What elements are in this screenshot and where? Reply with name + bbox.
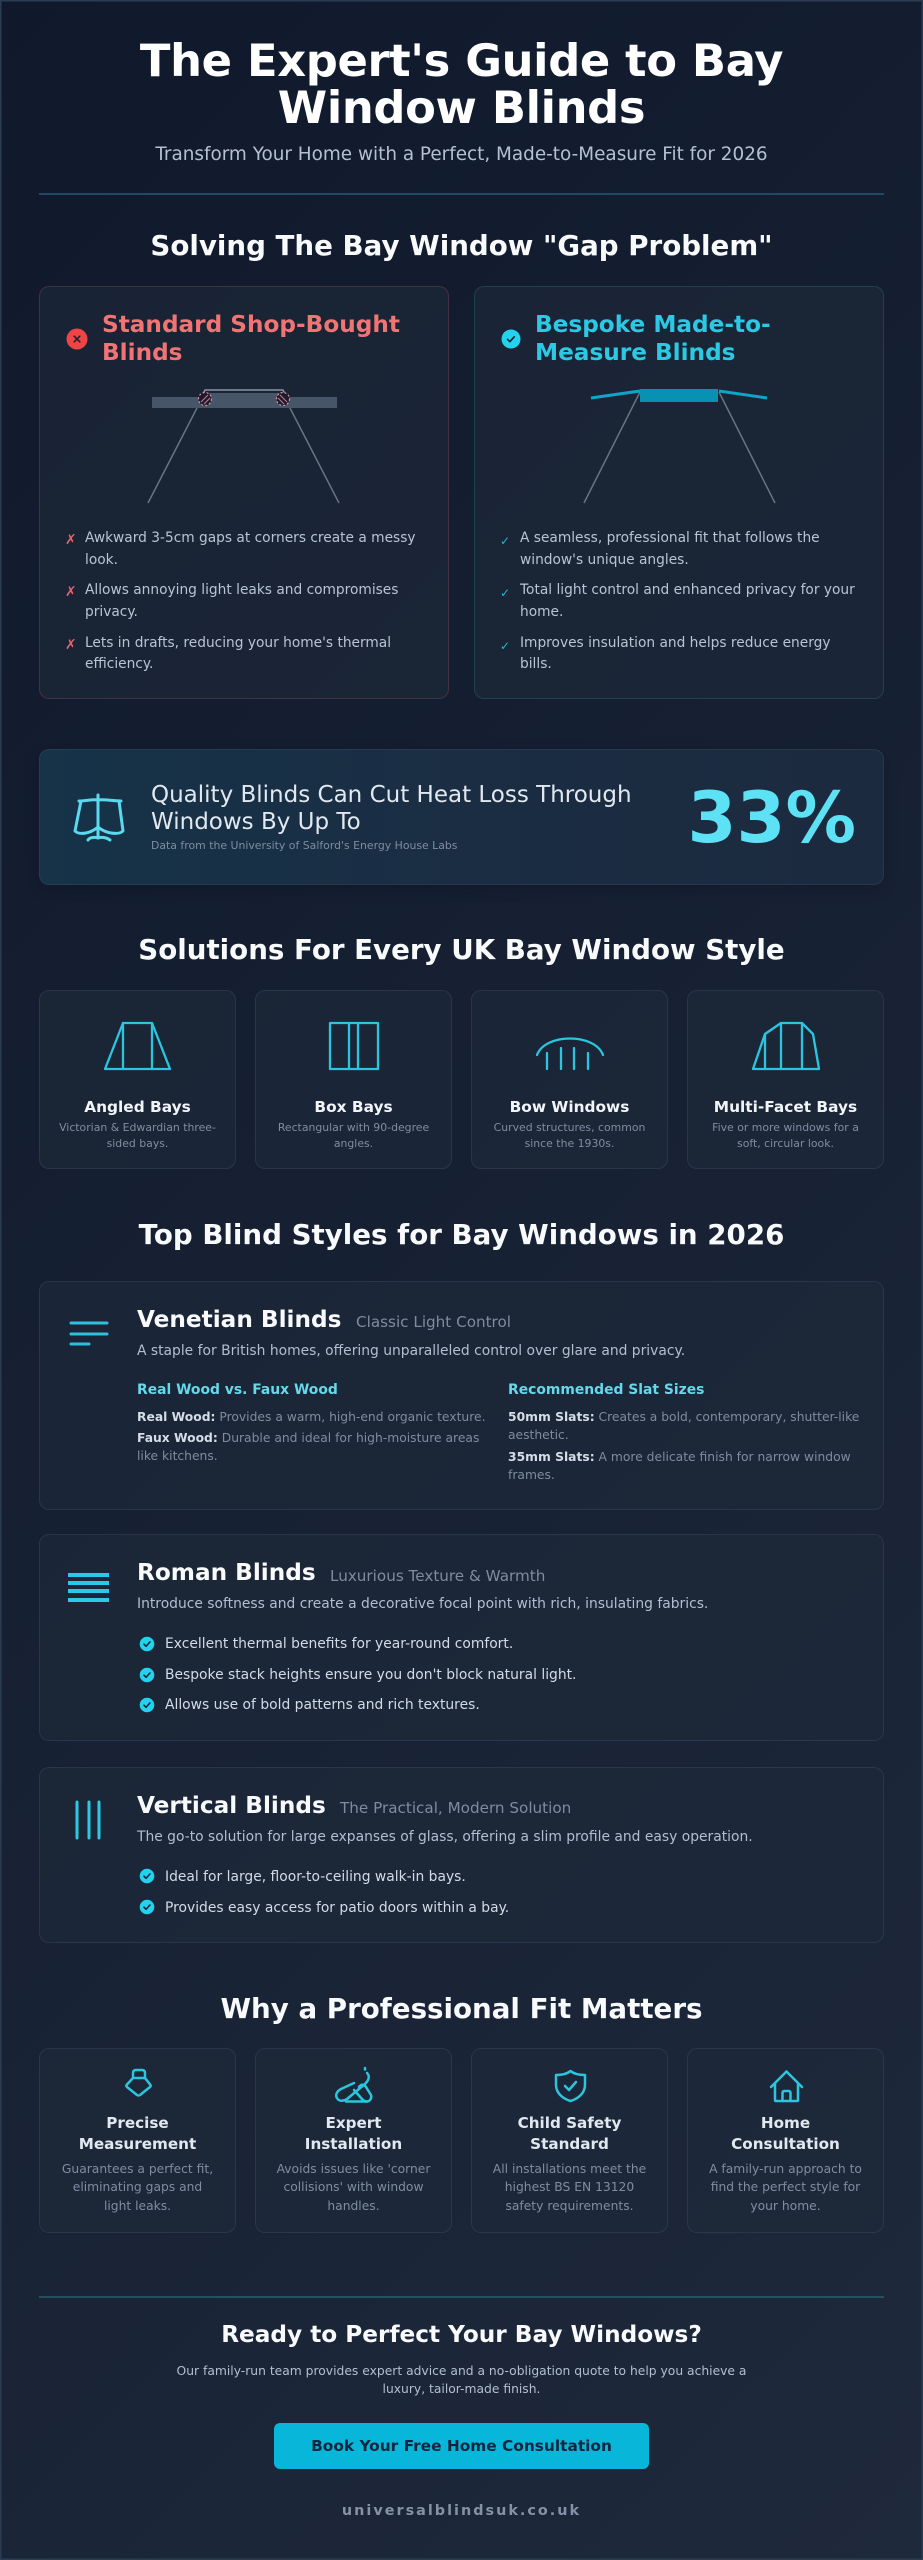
heading: standard: Blinds	[102, 339, 182, 366]
button	[274, 2423, 649, 2469]
description	[687, 2160, 884, 2215]
item	[500, 635, 830, 672]
description	[278, 1121, 429, 1150]
label: Standard	[530, 2135, 609, 2153]
label: Expert	[325, 2114, 382, 2132]
description	[255, 2160, 452, 2215]
list: benefits	[500, 530, 855, 672]
heading: standard	[102, 311, 400, 366]
title: Vertical Blinds	[137, 1792, 326, 1818]
heading: bespoke	[535, 311, 771, 366]
panel: home consultation	[687, 2048, 884, 2233]
description: Victorian & Edwardian three-	[59, 1121, 216, 1134]
icon: house	[766, 2065, 806, 2105]
description: Avoids issues like 'corner	[277, 2162, 430, 2176]
text	[137, 1431, 479, 1463]
text: frames.	[508, 1468, 555, 1482]
label	[687, 2113, 884, 2156]
description: A family-run approach to	[709, 2162, 862, 2176]
label: Box Bays	[314, 1098, 393, 1116]
item: look.	[85, 552, 118, 568]
icon: bow window	[536, 1037, 604, 1070]
item: efficiency.	[85, 656, 153, 672]
description	[39, 2160, 236, 2215]
label: Measurement	[79, 2135, 196, 2153]
description: Five or more windows for a	[712, 1121, 859, 1134]
label: Installation	[305, 2135, 402, 2153]
description: Curved structures, common	[494, 1121, 645, 1134]
description	[712, 1121, 859, 1150]
cta text: luxury, tailor-made finish.	[383, 2382, 540, 2396]
stat number: 33%	[688, 777, 856, 859]
title: The Expert's Guide to Bay	[140, 34, 783, 87]
title: Window Blinds	[278, 81, 645, 134]
diagram: perfect fit	[584, 389, 776, 504]
tagline: Luxurious Texture & Warmth	[330, 1567, 545, 1585]
label: Home	[761, 2114, 810, 2132]
label: Precise	[106, 2114, 169, 2132]
panel: expert installation	[255, 2048, 452, 2233]
description: angles.	[334, 1137, 373, 1150]
title	[140, 34, 783, 134]
icon: cyan check	[502, 330, 520, 348]
icon: scales	[74, 794, 124, 842]
text: 35mm Slats: A more delicate finish for narrow window	[508, 1450, 851, 1464]
panel: standard shop-bought blinds	[39, 286, 449, 699]
item: home.	[520, 604, 563, 620]
panel: child safety	[471, 2048, 668, 2233]
icon: shield	[550, 2065, 590, 2105]
description: All installations meet the	[493, 2162, 646, 2176]
item: ✓	[500, 639, 510, 653]
call to action	[39, 2296, 884, 2531]
description: highest BS EN 13120	[505, 2180, 634, 2194]
check icon	[140, 1868, 154, 1884]
label	[39, 2113, 236, 2156]
description: eliminating gaps and	[73, 2180, 202, 2194]
item: A seamless, professional fit that follows the	[520, 530, 820, 546]
text: aesthetic.	[508, 1428, 569, 1442]
source note: Data from the University of Salford's Energy House Labs	[151, 839, 457, 852]
item: ✓	[500, 586, 510, 600]
item: window's unique angles.	[520, 552, 689, 568]
panel: bow windows	[471, 990, 668, 1169]
item	[500, 530, 820, 568]
icon: venetian	[70, 1322, 108, 1346]
item: Awkward 3-5cm gaps at corners create a messy	[85, 530, 416, 546]
item: privacy.	[85, 604, 138, 620]
label	[255, 2113, 452, 2156]
column heading: Real Wood vs. Faux Wood	[137, 1382, 338, 1398]
panel: bespoke made-to-measure blinds	[474, 286, 884, 699]
description	[471, 2160, 668, 2215]
list item: Allows use of bold patterns and rich textures.	[165, 1697, 480, 1713]
heading: standard: Standard Shop-Bought	[102, 311, 400, 338]
item	[65, 530, 416, 568]
heading: blind styles: Top Blind Styles for Bay Windows in 2026	[139, 1218, 784, 1251]
stat text: Windows By Up To	[151, 809, 361, 835]
list item: Ideal for large, floor-to-ceiling walk-in bays.	[165, 1869, 466, 1885]
item: ✓	[500, 534, 510, 548]
list: problems	[65, 530, 416, 672]
heading: solutions: Solutions For Every UK Bay Window Style	[138, 933, 785, 966]
description: safety requirements.	[505, 2199, 634, 2213]
column: wood	[137, 1382, 486, 1463]
item	[500, 582, 855, 620]
title: Roman Blinds	[137, 1559, 316, 1586]
label: Angled Bays	[84, 1098, 191, 1116]
panel: heat loss stat	[39, 749, 884, 885]
description: The go-to solution for large expanses of glass, offering a slim profile and easy operation.	[137, 1829, 753, 1845]
icon: vertical	[76, 1800, 100, 1840]
tagline: The Practical, Modern Solution	[340, 1799, 571, 1817]
description: A staple for British homes, offering unparalleled control over glare and privacy.	[137, 1343, 685, 1359]
text: Faux Wood: Durable and ideal for high-moisture areas	[137, 1431, 479, 1445]
icon: red cross	[66, 328, 88, 350]
item: Allows annoying light leaks and compromises	[85, 582, 398, 598]
check icon	[140, 1636, 154, 1652]
description: Introduce softness and create a decorative focal point with rich, insulating fabrics.	[137, 1596, 708, 1612]
title: Venetian Blinds	[137, 1306, 341, 1332]
item: bills.	[520, 656, 552, 672]
panel: multi-facet bays	[687, 990, 884, 1169]
panel: roman blinds	[39, 1534, 884, 1741]
column: slat sizes	[508, 1382, 859, 1482]
website: universalblindsuk.co.uk	[342, 2503, 581, 2519]
icon: measurement	[118, 2065, 158, 2105]
heading: bespoke: Measure Blinds	[535, 339, 735, 366]
description: sided bays.	[107, 1137, 168, 1150]
icon: angled bay	[104, 1022, 172, 1070]
item: ✗	[65, 637, 77, 653]
icon: box bay	[328, 1022, 380, 1070]
description: handles.	[327, 2199, 380, 2213]
text	[508, 1450, 851, 1482]
label: Bow Windows	[510, 1098, 629, 1116]
item: Total light control and enhanced privacy for your	[520, 582, 855, 598]
item	[65, 582, 398, 620]
heading: professional fit: Why a Professional Fit Matters	[221, 1992, 702, 2025]
column heading: Recommended Slat Sizes	[508, 1382, 704, 1398]
item	[65, 635, 391, 672]
description: Rectangular with 90-degree	[278, 1121, 429, 1134]
button: Book Your Free Home Consultation	[311, 2437, 612, 2455]
check icon	[140, 1900, 154, 1914]
description: since the 1930s.	[525, 1137, 614, 1150]
description: your home.	[750, 2199, 821, 2213]
description: Guarantees a perfect fit,	[62, 2162, 213, 2176]
diagram: poor fit with gaps	[148, 389, 340, 504]
description: collisions' with window	[283, 2180, 424, 2194]
item: Improves insulation and helps reduce energy	[520, 635, 830, 651]
item: ✗	[65, 584, 77, 600]
panel: angled bays	[39, 990, 236, 1169]
list item: Bespoke stack heights ensure you don't block natural light.	[165, 1667, 576, 1683]
text	[508, 1410, 859, 1442]
icon: tools	[334, 2065, 374, 2105]
panel: venetian blinds	[39, 1281, 884, 1510]
text: 50mm Slats: Creates a bold, contemporary, shutter-like	[508, 1410, 859, 1424]
cta text	[39, 2362, 884, 2398]
subtitle: Transform Your Home with a Perfect, Made-to-Measure Fit for 2026	[155, 144, 768, 165]
icon: multi-facet bay	[752, 1022, 820, 1070]
label: Child Safety	[518, 2114, 621, 2132]
tagline: Classic Light Control	[356, 1313, 511, 1331]
list item: Provides easy access for patio doors within a bay.	[165, 1900, 509, 1916]
item: ✗	[65, 532, 77, 548]
heading: bespoke: Bespoke Made-to-	[535, 311, 771, 338]
cta heading: Ready to Perfect Your Bay Windows?	[221, 2321, 702, 2348]
header	[39, 34, 884, 195]
text: Real Wood: Provides a warm, high-end organic texture.	[137, 1410, 486, 1424]
panel: box bays	[255, 990, 452, 1169]
icon: roman	[68, 1573, 109, 1602]
cta text: Our family-run team provides expert advice and a no-obligation quote to help you achieve a	[177, 2364, 746, 2378]
list item: Excellent thermal benefits for year-round comfort.	[165, 1636, 513, 1652]
label	[471, 2113, 668, 2156]
check icon	[140, 1668, 154, 1682]
label: Consultation	[731, 2135, 840, 2153]
description: light leaks.	[104, 2199, 171, 2213]
check icon	[140, 1698, 154, 1712]
description	[59, 1121, 216, 1150]
heading: gap problem: Solving The Bay Window "Gap Problem"	[150, 229, 773, 262]
text: like kitchens.	[137, 1449, 218, 1463]
item: Lets in drafts, reducing your home's thermal	[85, 635, 391, 651]
description: find the perfect style for	[711, 2180, 860, 2194]
label: Multi-Facet Bays	[714, 1098, 857, 1116]
panel: vertical blinds	[39, 1767, 884, 1943]
description	[494, 1121, 645, 1150]
description: soft, circular look.	[737, 1137, 834, 1150]
stat text: Quality Blinds Can Cut Heat Loss Through	[151, 782, 632, 808]
stat text	[151, 782, 632, 835]
panel: precise measurement	[39, 2048, 236, 2233]
